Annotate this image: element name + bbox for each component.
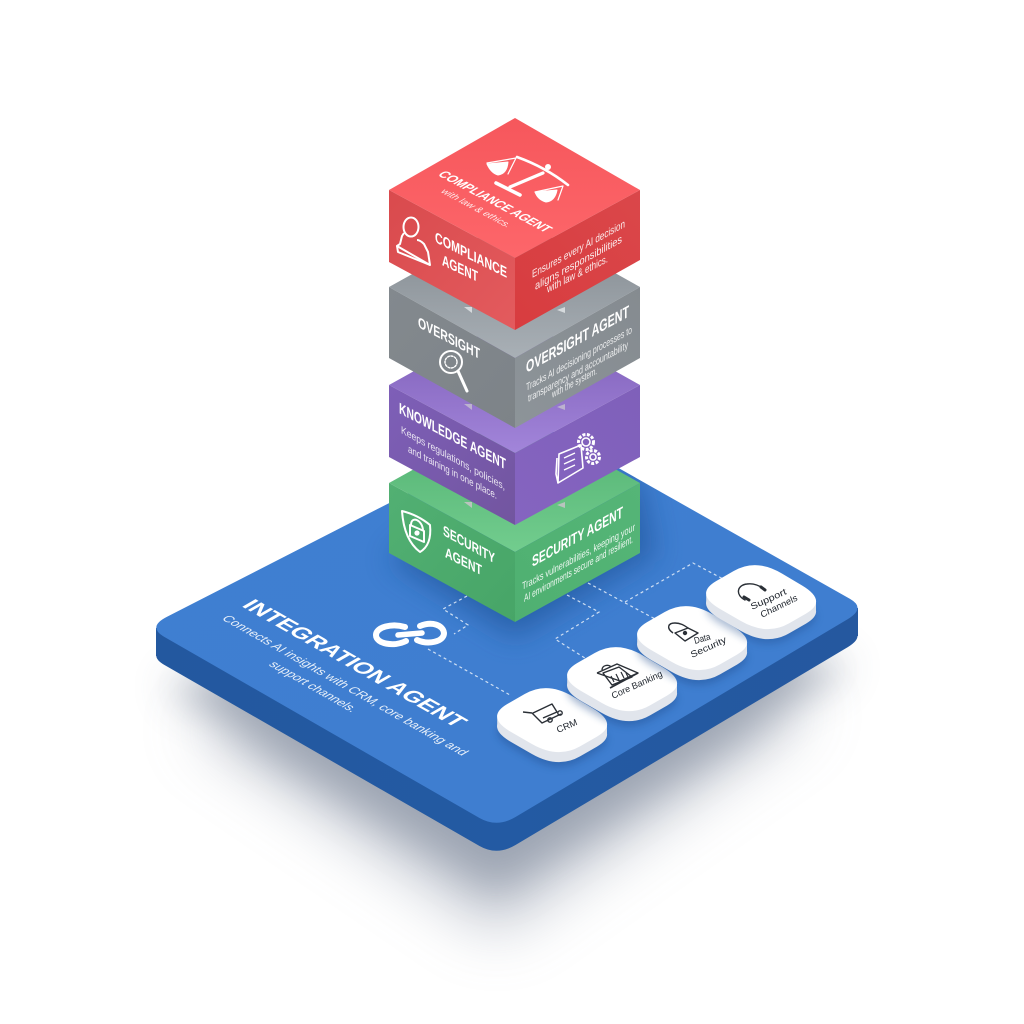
- icon: magnifying glass: [440, 351, 467, 391]
- block: compliance agent: [389, 118, 640, 330]
- chip: support channels: [706, 565, 816, 644]
- left label: AGENT: [442, 253, 478, 286]
- block: oversight agent: [389, 217, 640, 428]
- top heading: COMPLIANCE AGENT: [434, 169, 555, 235]
- label: support channels: Channels: [759, 593, 799, 621]
- right description: AI environments secure and resilient.: [524, 534, 633, 605]
- right description: with the system.: [551, 365, 597, 401]
- panel: integration agent platform: [156, 430, 858, 851]
- right description: transparency and accountability: [528, 339, 628, 405]
- description: Keeps regulations, policies,: [401, 425, 505, 493]
- label: support channels: Support: [749, 587, 788, 613]
- left label: OVERSIGHT: [418, 315, 480, 363]
- left label: [435, 230, 507, 286]
- label: support channels: [749, 587, 799, 621]
- label: CRM: CRM: [555, 718, 579, 736]
- chip: data security: [637, 606, 747, 685]
- left label: COMPLIANCE: [435, 230, 507, 282]
- icon: scales: [487, 157, 568, 202]
- right description: aligns responsibilities: [535, 232, 622, 293]
- icon: padlock: [669, 623, 698, 641]
- dashed connectors: [428, 563, 725, 695]
- connector triangles: [464, 404, 565, 410]
- top description: with law & ethics.: [437, 187, 514, 229]
- chip: core banking: [567, 647, 677, 726]
- label: core banking: Core Banking: [610, 669, 664, 702]
- right heading: SECURITY AGENT: [532, 503, 623, 571]
- left label: SECURITY: [443, 523, 495, 568]
- icon: bank: [597, 664, 638, 688]
- right heading: OVERSIGHT AGENT: [526, 301, 629, 377]
- icon: stamp: [397, 218, 430, 265]
- chip: CRM: [497, 688, 607, 767]
- label: data security: Security: [689, 635, 728, 661]
- platform side: [156, 458, 858, 851]
- icon: headset: [738, 584, 765, 600]
- heading: integration agent: INTEGRATION AGENT: [237, 596, 473, 730]
- block: security agent: [389, 413, 640, 622]
- right description: with law & ethics.: [546, 252, 608, 296]
- stack shadow on platform: [389, 470, 655, 638]
- icon: shield: [402, 511, 430, 552]
- right description: [522, 522, 635, 605]
- description: and training in one place.: [408, 444, 497, 502]
- icon: chain link: [376, 624, 444, 644]
- right description: Tracks AI decisioning processes to: [526, 324, 632, 394]
- description: integration agent: Connects AI insights with CRM, core banking and: [219, 613, 472, 757]
- right description: [526, 324, 632, 405]
- platform top face: [156, 430, 858, 823]
- infographic: isometric AI agent stack: [156, 118, 858, 953]
- label: data security: Data: [693, 632, 712, 647]
- right description: Tracks vulnerabilities, keeping your: [522, 522, 635, 593]
- left label: AGENT: [445, 545, 482, 579]
- heading: KNOWLEDGE AGENT: [399, 399, 506, 473]
- description: integration agent: support channels.: [266, 659, 362, 714]
- block: knowledge agent: [389, 315, 640, 525]
- icon: book and gears: [556, 434, 600, 483]
- connector triangles: [464, 307, 565, 313]
- right description: Ensures every AI decision: [532, 217, 625, 281]
- connector triangles: [464, 502, 565, 508]
- icon: cart: [523, 704, 562, 723]
- ground shadow: [165, 620, 850, 935]
